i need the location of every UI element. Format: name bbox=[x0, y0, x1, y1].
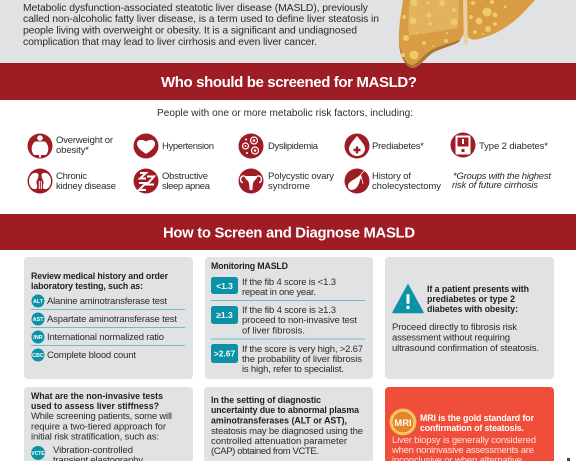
risk factor: chronic kidney disease: kidney disease bbox=[56, 181, 116, 192]
panel: diagnostic uncertainty bbox=[204, 387, 373, 461]
risk factor: obstructive sleep apnea: Obstructive bbox=[162, 171, 208, 182]
body: two-tiered approach bbox=[31, 411, 172, 442]
body: two-tiered approach: While screening patients, some will bbox=[31, 411, 172, 422]
risk factor: polycystic ovary syndrome: syndrome bbox=[268, 181, 310, 192]
risk factor: chronic kidney disease bbox=[28, 168, 116, 194]
MRI heading bbox=[420, 413, 535, 433]
MRI body bbox=[391, 435, 536, 461]
test: INR: International normalized ratio bbox=[47, 332, 164, 343]
risk factor: overweight or obesity: obesity* bbox=[56, 145, 89, 156]
icon: fatty liver illustration bbox=[399, 0, 535, 68]
icon: heart bbox=[134, 134, 158, 158]
risk factor: dyslipidemia bbox=[238, 134, 319, 158]
risk factor: chronic kidney disease: Chronic bbox=[56, 171, 87, 182]
callout body bbox=[392, 322, 539, 354]
score row: at least 1.3: If the fib 4 score is ≥1.3 bbox=[242, 305, 336, 316]
score row: above 2.67: the probability of liver fibrosis bbox=[242, 354, 362, 365]
test: AST: AST bbox=[33, 317, 44, 323]
heading: review history: laboratory testing, such as: bbox=[31, 281, 143, 291]
callout heading: prediabetes or type 2 bbox=[427, 294, 515, 304]
risk factor: history of cholecystectomy bbox=[344, 168, 441, 194]
bold statement: aminotransferases (ALT or AST), bbox=[211, 416, 347, 426]
panel: prediabetes with obesity bbox=[385, 257, 554, 379]
test: CBC: Complete blood count bbox=[47, 350, 136, 361]
icon: gallbladder bbox=[344, 168, 370, 194]
callout heading: If a patient presents with bbox=[427, 284, 529, 294]
icon: warning triangle bbox=[393, 285, 423, 312]
risk factor: prediabetes: Prediabetes* bbox=[372, 141, 424, 152]
panel: non-invasive tests bbox=[24, 387, 193, 461]
score row: below 1.3: repeat in one year. bbox=[242, 287, 316, 298]
MRI heading: MRI is the gold standard for bbox=[420, 413, 535, 423]
MRI body: Liver biopsy is generally considered bbox=[392, 435, 536, 446]
body: two-tiered approach: require a two-tiered approach for bbox=[31, 422, 166, 432]
icon: body bbox=[28, 134, 52, 158]
section banner: who should be screened: Who should be screened for MASLD? bbox=[161, 74, 417, 91]
heading: liver stiffness bbox=[31, 391, 163, 411]
score row: above 2.67: If the score is very high, >2.67 bbox=[242, 344, 363, 355]
bold statement: uncertainty due to abnormal plasma bbox=[211, 405, 359, 415]
section banner: who should be screened bbox=[0, 63, 576, 100]
icon: glucose meter bbox=[450, 132, 476, 158]
callout body: assessment without requiring bbox=[392, 332, 510, 344]
footnote: highest risk groups: risk of future cirrhosis bbox=[452, 180, 538, 191]
icon: blood drop bbox=[344, 134, 370, 158]
panel: introduction bbox=[0, 0, 576, 64]
body: CAP: steatosis may be diagnosed using the bbox=[211, 426, 363, 437]
body: CAP: controlled attenuation parameter bbox=[211, 436, 347, 447]
test: VCTE bbox=[31, 445, 143, 461]
test: ALT: Alanine aminotransferase test bbox=[47, 296, 167, 307]
risk factor: overweight or obesity: Overweight or bbox=[56, 135, 113, 146]
callout body: Proceed directly to fibrosis risk bbox=[392, 322, 517, 333]
risk factor: obstructive sleep apnea bbox=[134, 168, 211, 194]
test: ALT: ALT bbox=[33, 299, 44, 305]
panel: laboratory testing bbox=[24, 257, 193, 379]
risk factor: hypertension bbox=[134, 134, 214, 158]
icon: MRI badge: MRI bbox=[394, 418, 412, 429]
risk factor: obstructive sleep apnea: sleep apnea bbox=[162, 181, 211, 192]
bold statement: In the setting of diagnostic bbox=[211, 395, 321, 405]
intro text: called non-alcoholic fatty liver disease, is a term used to define liver steatosis in bbox=[23, 14, 379, 25]
footnote: highest risk groups: *Groups with the highest bbox=[453, 171, 551, 182]
intro text: people living with overweight or obesity. It is a significant and undiagnosed bbox=[23, 26, 357, 36]
risk factor: polycystic ovary syndrome bbox=[238, 168, 334, 194]
risk factor: type 2 diabetes bbox=[450, 132, 548, 158]
test: VCTE: VCTE bbox=[31, 451, 45, 457]
panel: monitoring MASLD bbox=[205, 257, 373, 379]
risk factor: prediabetes bbox=[344, 134, 424, 158]
callout body: ultrasound confirmation of steatosis. bbox=[392, 343, 539, 354]
panel: MRI gold standard bbox=[385, 387, 554, 461]
test: CBC: CBC bbox=[32, 353, 44, 359]
small corner mark bbox=[567, 458, 570, 461]
intro text: Metabolic dysfunction-associated steatotic liver disease (MASLD), previously bbox=[23, 3, 369, 14]
body: two-tiered approach: initial risk stratification, such as: bbox=[31, 432, 159, 442]
test: AST: Aspartate aminotransferase test bbox=[47, 314, 177, 325]
section banner: how to screen and diagnose: How to Screen and Diagnose MASLD bbox=[163, 226, 415, 242]
icon: uterus bbox=[238, 168, 264, 194]
callout heading bbox=[427, 284, 529, 314]
heading: monitoring: Monitoring MASLD bbox=[211, 261, 288, 271]
heading: liver stiffness: What are the non-invasive tests bbox=[31, 391, 163, 401]
score row: above 2.67 bbox=[211, 344, 363, 375]
test: INR: INR bbox=[33, 335, 43, 341]
icon: MRI badge bbox=[390, 408, 416, 436]
MRI heading: confirmation of steatosis. bbox=[420, 423, 524, 433]
score row: below 1.3: <1.3 bbox=[216, 281, 233, 291]
risk factor: polycystic ovary syndrome: Polycystic ovary bbox=[268, 171, 334, 182]
heading: review history bbox=[31, 271, 169, 291]
score row: at least 1.3: ≥1.3 bbox=[216, 310, 233, 320]
icon: ZZZ bbox=[134, 168, 158, 194]
MRI body: when noninvasive assessments are bbox=[391, 445, 534, 456]
risk factor: overweight or obesity bbox=[28, 134, 113, 158]
score row: at least 1.3: proceed to non-invasive test bbox=[242, 315, 357, 326]
risk factor: type 2 diabetes: Type 2 diabetes* bbox=[479, 141, 548, 152]
risk factor: history of cholecystectomy: cholecystectomy bbox=[372, 181, 441, 192]
body: CAP bbox=[211, 426, 363, 457]
risk factor: history of cholecystectomy: History of bbox=[372, 171, 411, 182]
section banner: how to screen and diagnose bbox=[0, 214, 576, 250]
score row: at least 1.3 bbox=[211, 305, 357, 336]
bold statement bbox=[211, 395, 359, 426]
icon: lipid cells bbox=[238, 134, 264, 158]
test: VCTE: Vibration-controlled bbox=[53, 445, 133, 456]
intro text bbox=[23, 3, 379, 48]
score row: above 2.67: is high, refer to specialist. bbox=[242, 364, 344, 375]
screening intro sentence: People with one or more metabolic risk factors, including: bbox=[157, 108, 413, 119]
risk factor: dyslipidemia: Dyslipidemia bbox=[268, 141, 319, 152]
score row: above 2.67: >2.67 bbox=[214, 348, 236, 358]
score row: below 1.3 bbox=[211, 277, 336, 298]
heading: review history: Review medical history and order bbox=[31, 271, 169, 281]
intro text: complication that may lead to liver cirrhosis and even liver cancer. bbox=[23, 37, 317, 48]
heading: liver stiffness: used to assess liver stiffness? bbox=[31, 401, 159, 411]
footnote: highest risk groups bbox=[452, 171, 551, 191]
body: CAP: (CAP) obtained from VCTE. bbox=[211, 446, 319, 457]
callout heading: diabetes with obesity: bbox=[427, 304, 518, 314]
score row: at least 1.3: of liver fibrosis. bbox=[242, 326, 305, 336]
risk factor: hypertension: Hypertension bbox=[162, 141, 214, 152]
score row: below 1.3: If the fib 4 score is <1.3 bbox=[242, 277, 336, 288]
icon: kidneys bbox=[28, 168, 52, 194]
